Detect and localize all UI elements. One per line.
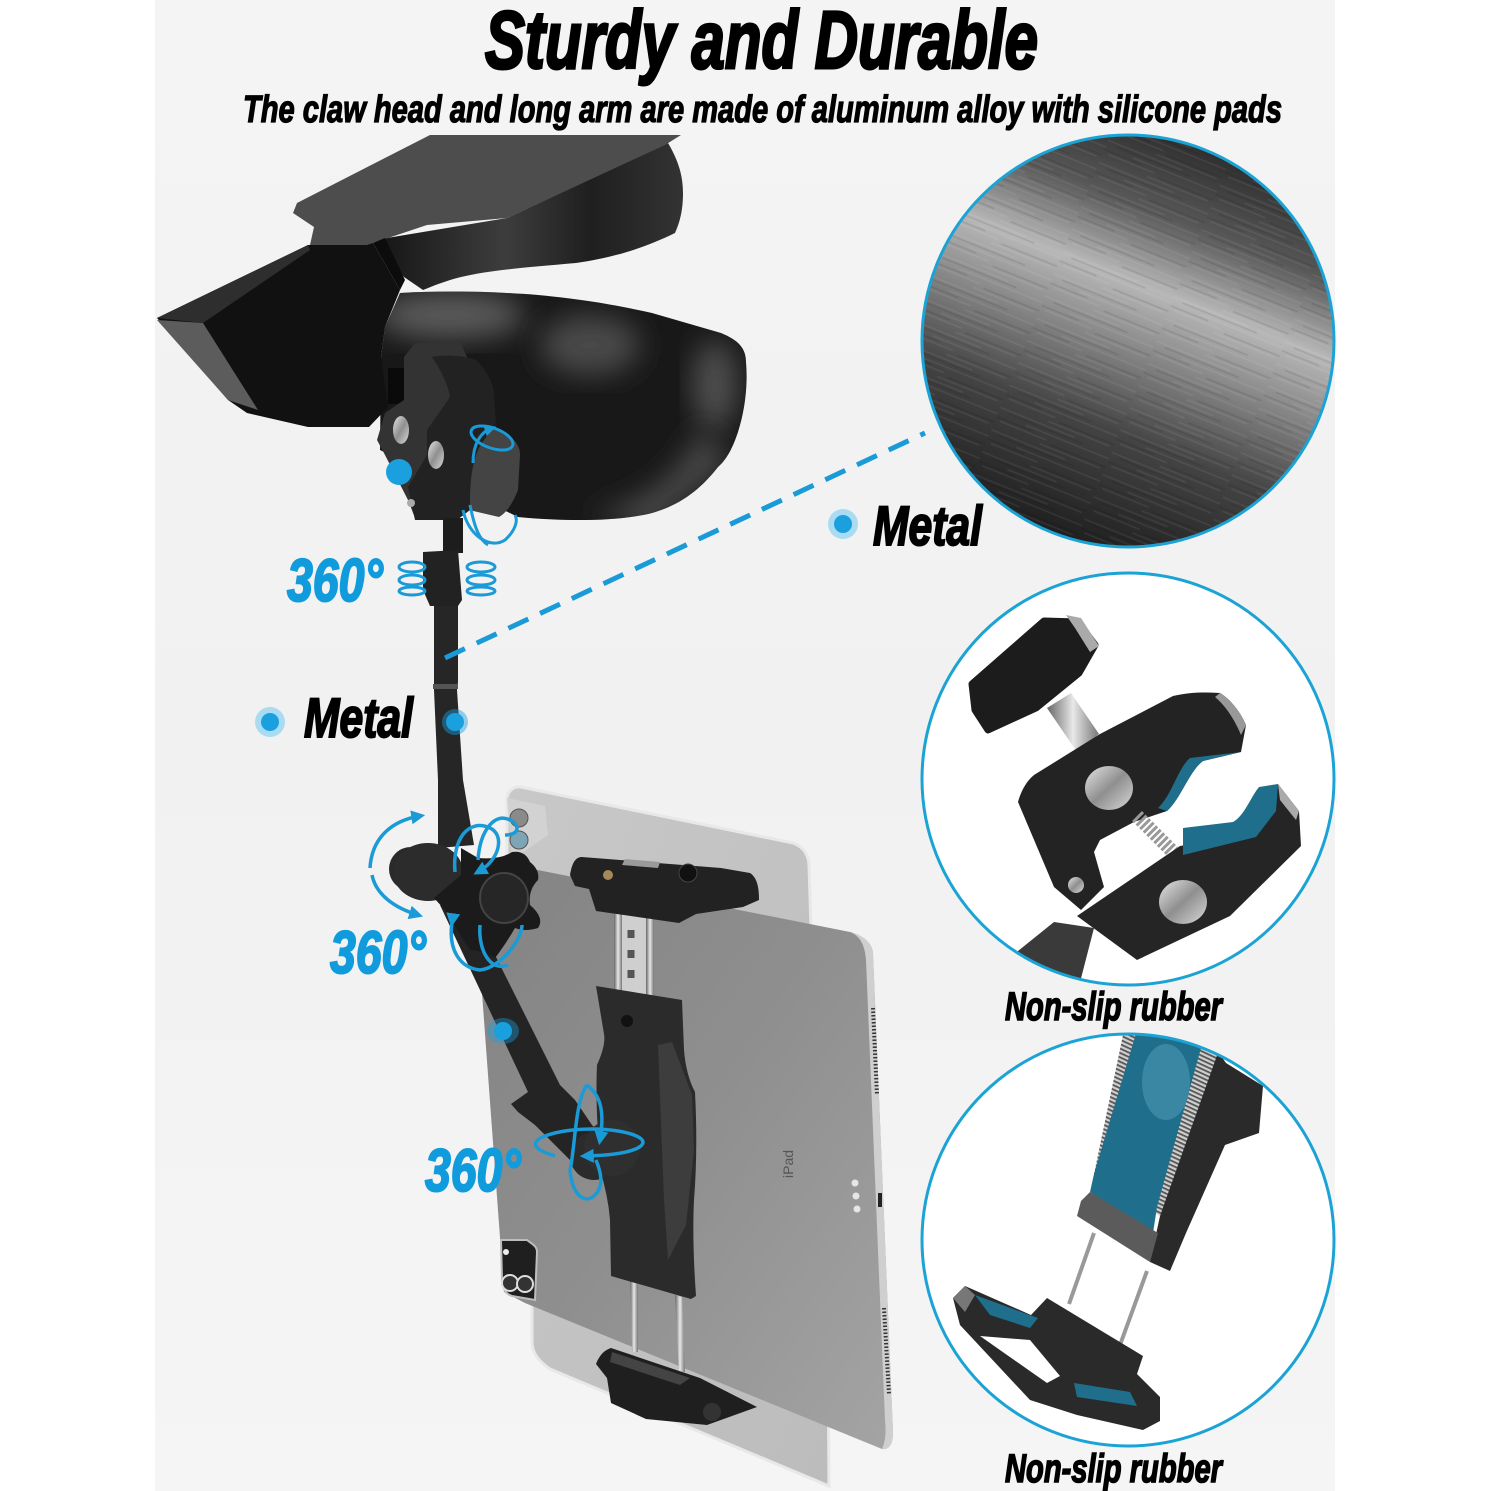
label: 360 bottom: 360° bbox=[425, 1137, 522, 1204]
lower rails bbox=[630, 1275, 638, 1352]
illustration: tablet bbox=[472, 787, 893, 1486]
illustration: upper arm bbox=[423, 518, 474, 848]
tablet dots bbox=[852, 1180, 860, 1212]
panel: metal texture bbox=[922, 135, 1334, 547]
top holder bbox=[570, 857, 759, 923]
collar bbox=[423, 550, 462, 606]
legend: Metal right: Metal bbox=[873, 494, 983, 557]
visor top plate bbox=[293, 135, 681, 245]
knob bbox=[972, 621, 1095, 730]
holder blue pads bbox=[975, 1295, 1038, 1328]
stem bbox=[443, 518, 463, 553]
tablet back view bbox=[507, 787, 829, 1486]
rotation arrows on collar bbox=[399, 562, 495, 595]
visor lower left bbox=[157, 243, 400, 427]
marker dot: clamp bbox=[386, 459, 412, 485]
illustration: elbow and lower arm bbox=[389, 843, 640, 1180]
marker dot: lower arm bbox=[487, 1018, 519, 1044]
rotation arrows on elbow bbox=[370, 816, 522, 970]
illustration: rear-view mirror and visor bbox=[157, 135, 747, 530]
illustration: tablet holder bbox=[570, 857, 759, 1425]
grip lip bbox=[1077, 1192, 1158, 1262]
holder body bbox=[596, 986, 696, 1299]
elbow ball bbox=[389, 847, 433, 891]
grip striped edge bbox=[1094, 1030, 1226, 1216]
top jaw rubber pad bbox=[1158, 752, 1241, 811]
bottom jaw bbox=[1077, 784, 1301, 960]
legend: Metal left bbox=[255, 686, 414, 749]
legend: Metal right bbox=[828, 494, 983, 557]
clamp back jaw bbox=[377, 343, 470, 518]
dashed callout line bbox=[445, 433, 925, 658]
clamp lever bbox=[461, 427, 520, 517]
back tablet camera bbox=[507, 798, 548, 860]
spring bbox=[1137, 816, 1173, 852]
marker dot: long arm bbox=[442, 709, 468, 735]
clamp neck bbox=[388, 368, 434, 404]
illustration: mirror clamp bbox=[377, 343, 520, 545]
grip blue pad bbox=[1090, 1030, 1206, 1233]
clamp stub bbox=[1018, 922, 1094, 978]
speaker grilles bbox=[873, 1008, 889, 1394]
background panel bbox=[155, 0, 1335, 1491]
clamp bolts bbox=[393, 416, 409, 444]
elbow knob bbox=[434, 848, 540, 958]
upper rails bbox=[614, 914, 654, 1000]
tablet camera bbox=[501, 1240, 537, 1300]
bottom jaw rubber pad bbox=[1183, 784, 1278, 855]
rotation arrows on lower joint bbox=[535, 1085, 643, 1199]
screw bbox=[1047, 693, 1099, 752]
clamp front jaw bbox=[408, 356, 496, 520]
bolts bbox=[1085, 766, 1133, 810]
legend: Metal left: Metal bbox=[304, 686, 414, 749]
rotation arrows on clamp bbox=[463, 421, 516, 545]
lower arm bbox=[440, 905, 615, 1178]
top jaw bbox=[1018, 692, 1246, 910]
bottom holder bbox=[953, 1286, 1160, 1430]
rods bbox=[1069, 1233, 1147, 1345]
caption: rubber one: Non-slip rubber bbox=[1005, 985, 1224, 1029]
panel: claw clamp detail bbox=[922, 573, 1334, 990]
visor left light face bbox=[157, 320, 258, 410]
grip black side bbox=[1150, 1035, 1263, 1271]
long arm bbox=[434, 606, 474, 848]
lower joint bbox=[570, 1132, 618, 1180]
holder opening bbox=[980, 1336, 1060, 1383]
label: 360 top: 360° bbox=[287, 547, 384, 614]
tablet logo text: iPad bbox=[780, 1150, 796, 1178]
bottom holder bbox=[596, 1348, 757, 1425]
tablet front view bbox=[472, 857, 893, 1449]
visor right wing bbox=[375, 143, 683, 290]
mirror body bbox=[375, 291, 747, 530]
panel: holder rubber detail bbox=[922, 1030, 1334, 1446]
caption: rubber two: Non-slip rubber bbox=[1005, 1447, 1224, 1491]
label: 360 middle: 360° bbox=[330, 919, 427, 986]
